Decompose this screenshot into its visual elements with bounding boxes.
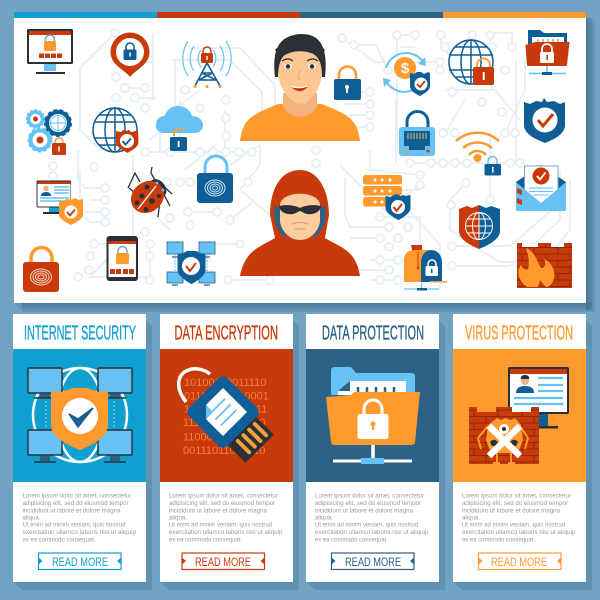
text block — [169, 493, 283, 543]
icon: mailbox with lock — [404, 245, 447, 290]
icon: folder with lock — [526, 30, 570, 75]
icon: money exchange — [383, 53, 430, 96]
text block: incididunt ut labore et dolore magna — [22, 507, 121, 514]
text block: ex ea commodo consequat. — [169, 536, 242, 543]
illustration: binary code and usb lock: 11101101101010 — [183, 417, 265, 429]
icon: tablet with lock — [106, 236, 138, 281]
text block: ex ea commodo consequat. — [22, 536, 96, 543]
button: read more: READ MORE — [491, 555, 547, 569]
text block: Ut enim ad minim veniam, quis nostrud — [22, 522, 126, 529]
icon: location pin with lock — [110, 32, 150, 77]
icon: blue padlock — [334, 66, 361, 100]
icon: profile monitor with shield — [36, 180, 83, 225]
icon: fingerprint padlock red — [23, 248, 59, 292]
text block: adipisicing elit, sed do eiusmod tempor — [315, 500, 422, 507]
text block: aliqua. — [462, 515, 480, 522]
text block: aliqua. — [169, 515, 187, 522]
illustration: hooded hacker — [240, 170, 360, 276]
icon: fingerprint padlock blue — [197, 156, 233, 203]
button: read more: READ MORE — [195, 555, 251, 569]
text block: adipisicing elit, sed do eiusmod tempor — [169, 500, 276, 507]
panel: icon collage — [14, 12, 595, 312]
text block — [315, 493, 429, 543]
text block: exercitation ullamco laboris nisi ut aliquip — [169, 529, 283, 536]
illustration: smiling man — [240, 34, 360, 141]
icon: money exchange: $ — [401, 60, 410, 77]
icon: signal tower with lock — [183, 41, 231, 88]
text block: adipisicing elit, sed do eiusmod tempor — [462, 500, 569, 507]
icon: firewall with flame — [517, 243, 572, 288]
text block: Ut enim ad minim veniam, quis nostrud — [315, 522, 418, 529]
icon: envelope with letter — [516, 165, 566, 211]
card: internet security — [13, 314, 152, 590]
text block: incididunt ut labore et dolore magna — [315, 507, 413, 514]
circuit board background — [49, 29, 570, 290]
text block — [462, 493, 576, 543]
text block: incididunt ut labore et dolore magna — [462, 507, 560, 514]
heading: data encryption: DATA ENCRYPTION — [174, 322, 278, 344]
text block — [22, 493, 136, 543]
illustration: globe, monitors and shield — [28, 368, 132, 462]
button: read more: READ MORE — [345, 555, 401, 569]
icon: ladybug — [124, 167, 172, 220]
illustration: folder with lock — [326, 367, 420, 464]
text block: exercitation ullamco laboris nisi ut aliquip — [462, 529, 576, 536]
icon: monitor with lock — [27, 29, 73, 74]
illustration: monitor, firewall and virus — [469, 367, 569, 464]
icon: cloud with lock — [156, 106, 203, 151]
text block: ex ea commodo consequat. — [315, 536, 388, 543]
text block: Lorem ipsum dolor sit amet, consectetur — [462, 493, 572, 500]
text block: aliqua. — [315, 515, 333, 522]
icon: server with shield — [363, 175, 410, 220]
text block: Lorem ipsum dolor sit amet, consectetur — [315, 493, 425, 500]
icon: wifi with lock — [456, 133, 501, 176]
card: data protection — [306, 314, 445, 590]
icon: globe with red shield — [93, 108, 138, 153]
card: data encryption — [160, 314, 299, 590]
text block: exercitation ullamco laboris nisi ut aliquip — [22, 529, 136, 536]
text block: adipisicing elit, sed do eiusmod tempor — [22, 500, 129, 507]
icon: globe with padlock — [449, 40, 494, 85]
icon: gears with lock — [27, 110, 70, 155]
heading: data protection: DATA PROTECTION — [322, 322, 424, 344]
text block: Lorem ipsum dolor sit amet, consectetur — [22, 493, 132, 500]
button: read more — [182, 553, 264, 570]
text block: exercitation ullamco laboris nisi ut aliquip — [315, 529, 429, 536]
text block: aliqua. — [22, 515, 41, 522]
text block: Ut enim ad minim veniam, quis nostrud — [169, 522, 272, 529]
text block: incididunt ut labore et dolore magna — [169, 507, 267, 514]
button: read more — [332, 553, 414, 570]
button: read more — [38, 553, 121, 570]
illustration: binary code and usb lock: 11010110100011 — [184, 404, 267, 416]
icon: network shield — [167, 242, 215, 285]
icon: ethernet padlock — [399, 112, 435, 156]
icon: shield with globe — [459, 205, 500, 249]
text block: Lorem ipsum dolor sit amet, consectetur — [169, 493, 279, 500]
card: virus protection — [453, 314, 592, 590]
illustration: binary code and usb lock: 10100110011110 — [184, 377, 266, 389]
text block: Ut enim ad minim veniam, quis nostrud — [462, 522, 565, 529]
heading: internet security: INTERNET SECURITY — [24, 322, 136, 344]
illustration: binary code and usb lock: 11000101010110 — [183, 432, 267, 444]
text block: ex ea commodo consequat. — [462, 536, 535, 543]
illustration: binary code and usb lock: 00111011011010 — [183, 445, 265, 457]
icon: shield with check — [524, 98, 565, 143]
button: read more: READ MORE — [52, 555, 108, 569]
illustration: binary code and usb lock — [179, 369, 279, 468]
illustration: binary code and usb lock: 01101010010001 — [184, 390, 269, 402]
